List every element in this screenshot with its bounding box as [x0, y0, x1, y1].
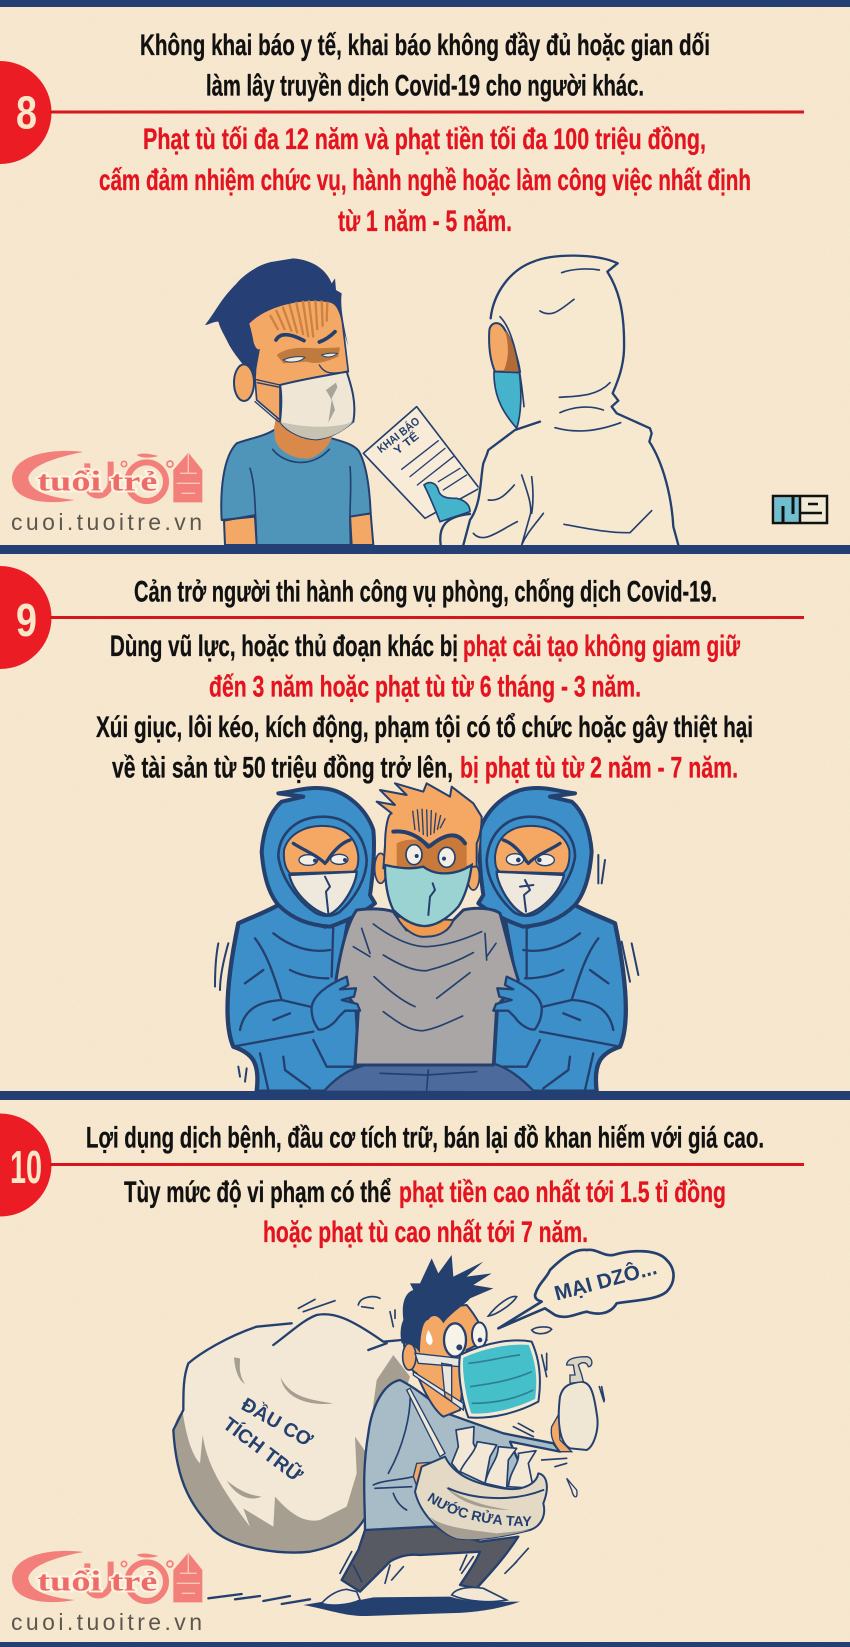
illustration: hoarder with sack: [173, 1297, 410, 1604]
number badge 10: 10: [10, 1141, 42, 1193]
speech bubble: [498, 1250, 674, 1328]
shoulder strap: [407, 1388, 445, 1457]
N9 signature badge: [773, 496, 827, 523]
penalty text 9: đến 3 năm hoặc phạt tù từ 6 tháng - 3 năm.: [209, 670, 641, 703]
heading 8: làm lây truyền dịch Covid-19 cho người khác.: [206, 70, 644, 103]
shadow dashes: [208, 1594, 310, 1604]
illustration: man with mask: [205, 258, 479, 545]
shirt: [364, 1380, 560, 1530]
motion marks: [340, 1353, 604, 1583]
logo: Cuoi Tuoi Tre bottom: [12, 1551, 202, 1602]
pants: [342, 1525, 518, 1592]
number badge 8: 8: [16, 87, 37, 139]
sanitizer bottle and hand: [551, 1357, 598, 1452]
small bottles: [452, 1427, 536, 1488]
penalty text 10: phạt tiền cao nhất tới 1.5 tỉ đồng: [399, 1176, 726, 1209]
illustration: medical worker in protective suit: [440, 256, 678, 545]
penalty text 9: bị phạt tù từ 2 năm - 7 năm.: [460, 752, 738, 784]
sanitizer bag: NƯỚC RỬA TAY: [427, 1492, 532, 1526]
document: health declaration: Y TẾ: [391, 429, 422, 457]
number badge 9: 9: [16, 594, 37, 646]
number badge 8: [0, 61, 52, 164]
sack: ĐẦU CƠ: [237, 1393, 317, 1452]
hoarder figure: [304, 1248, 675, 1616]
document: health declaration: [363, 407, 479, 522]
penalty text 9: Dùng vũ lực, hoặc thủ đoạn khác bị: [110, 630, 458, 663]
penalty text 9: [96, 630, 753, 784]
panel: item 10: [0, 1114, 804, 1635]
head: [403, 1305, 487, 1417]
panel: item 8: [0, 29, 827, 545]
officer right: [478, 788, 626, 1092]
officer left: [227, 788, 375, 1092]
number badge 9: [0, 566, 52, 669]
red divider 9: [50, 616, 804, 619]
mask straps: [413, 1353, 463, 1410]
logo: Cuoi Tuoi Tre: tuổi trẻ: [37, 467, 157, 498]
glove left: [312, 977, 360, 1030]
penalty text 9: về tài sản từ 50 triệu đồng trở lên,: [112, 752, 453, 784]
penalty text 8: [99, 123, 751, 238]
penalty text 10: hoặc phạt tù cao nhất tới 7 năm.: [263, 1216, 588, 1249]
logo: Cuoi Tuoi Tre bottom: tuổi trẻ: [37, 1567, 157, 1598]
shoes: [322, 1587, 507, 1605]
logo: Cuoi Tuoi Tre: [12, 451, 202, 502]
number badge 10: [0, 1114, 52, 1216]
sack: TÍCH TRỮ: [219, 1411, 308, 1487]
illustration: two officers holding a man: [215, 783, 638, 1092]
red divider 8: [50, 110, 804, 114]
sanitizer bag: [414, 1456, 548, 1540]
panel: item 9: [0, 566, 804, 1092]
motion lines: [215, 855, 638, 1082]
man in grey sweater: [336, 783, 518, 1090]
glove right: [493, 977, 542, 1030]
hand on bag: [413, 1462, 440, 1495]
document: health declaration: KHAI BÁO: [375, 415, 422, 456]
pants: [323, 1063, 535, 1092]
sack: [173, 1297, 410, 1552]
logo url: cuoi.tuoitre.vn: [11, 509, 202, 535]
penalty text 8: từ 1 năm - 5 năm.: [338, 205, 512, 238]
red divider 10: [50, 1163, 804, 1166]
penalty text 10: [124, 1176, 726, 1249]
heading 8: [140, 29, 710, 103]
face mask: [459, 1340, 540, 1418]
speech bubble: MẠI DZÔ...: [552, 1255, 659, 1305]
penalty text 10: Tùy mức độ vi phạm có thể: [124, 1176, 391, 1209]
logo url bottom: cuoi.tuoitre.vn: [11, 1609, 202, 1635]
